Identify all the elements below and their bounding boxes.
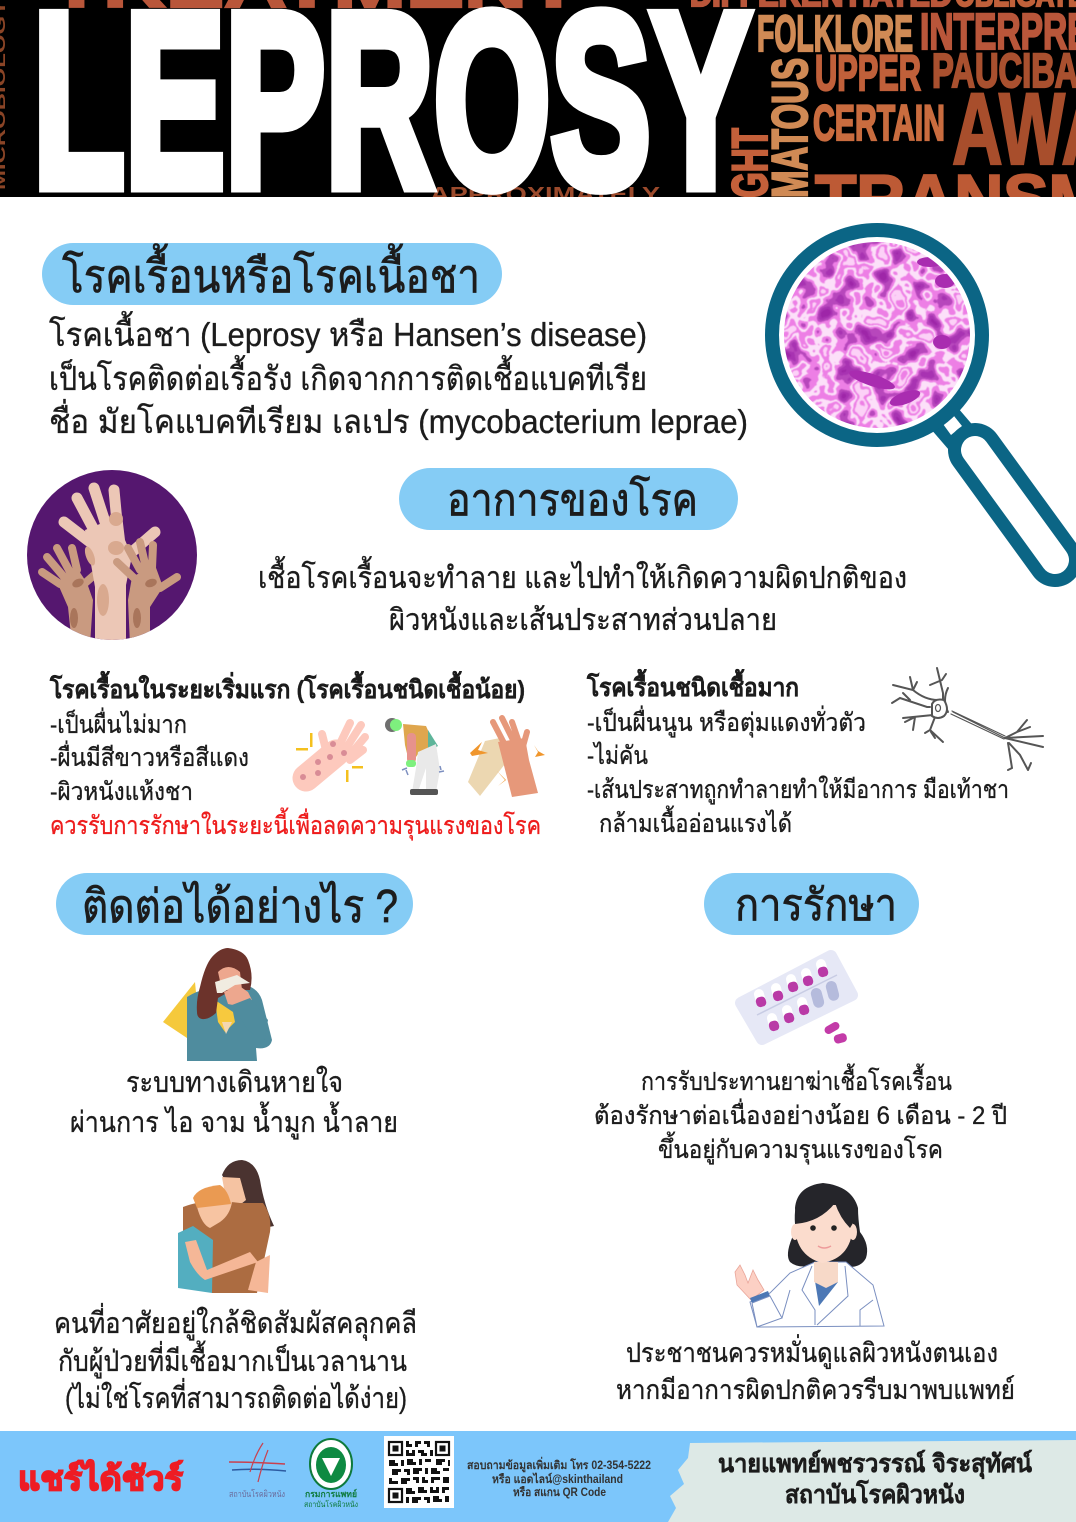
header banner: word cloud with LEPROSY title: UPPER [815, 45, 921, 101]
caption: close contact transmission: กับผู้ป่วยที่มีเชื้อมากเป็นเวลานาน [58, 1340, 407, 1379]
contact text: หรือ สแกน QR Code [513, 1486, 606, 1499]
logo: institute of dermatology [229, 1443, 286, 1499]
QR code [384, 1436, 454, 1508]
panel: early stage leprosy: -เป็นผื่นไม่มาก [50, 707, 187, 739]
heading pill: symptoms [399, 468, 738, 530]
panel: multibacillary leprosy: โรคเรื้อนชนิดเชื้อมาก [586, 668, 799, 702]
footer band [0, 1431, 1076, 1522]
logo: department of medical services [304, 1439, 358, 1509]
panel: multibacillary leprosy: -เส้นประสาทถูกทำลายทำให้มีอาการ มือเท้าชา [587, 775, 1009, 805]
caption: drug treatment [594, 1063, 1007, 1165]
symptoms intro text: เชื้อโรคเรื้อนจะทำลาย และไปทำให้เกิดความผิดปกติของ [258, 556, 907, 595]
heading pill: what is leprosy: โรคเรื้อนหรือโรคเนื้อชา [62, 243, 480, 302]
panel: early stage leprosy: -ผิวหนังแห้งชา [50, 778, 193, 806]
brand tagline: แชร์ได้ชัวร์ [18, 1459, 183, 1497]
definition text: เป็นโรคติดต่อเรื้อรัง เกิดจากการติดเชื้อแบคทีเรีย [49, 355, 647, 397]
caption: public advice [616, 1334, 1015, 1405]
caption: drug treatment: ขึ้นอยู่กับความรุนแรงของโรค [658, 1131, 943, 1165]
caption: close contact transmission: คนที่อาศัยอยู่ใกล้ชิดสัมผัสคลุกคลี [54, 1303, 417, 1341]
caption: public advice: ประชาชนควรหมั่นดูแลผิวหนังตนเอง [626, 1334, 998, 1369]
panel: early stage leprosy: ควรรับการรักษาในระยะนี้เพื่อลดความรุนแรงของโรค [50, 807, 541, 841]
icon: person bent over in pain [385, 718, 444, 795]
heading pill: symptoms: อาการของโรค [447, 475, 698, 525]
contact text: สอบถามข้อมูลเพิ่มเติม โทร 02-354-5222 [467, 1456, 651, 1473]
header banner: word cloud with LEPROSY title: CERTAIN [813, 95, 945, 151]
caption: public advice: หากมีอาการผิดปกติควรรีบมาพบแพทย์ [616, 1374, 1015, 1405]
caption: drug treatment: การรับประทานยาฆ่าเชื้อโรคเรื้อน [641, 1063, 952, 1096]
header banner: word cloud with LEPROSY title: APPROXIMATELY [430, 184, 661, 206]
illustration: blister pack of capsules [741, 956, 852, 1044]
panel: early stage leprosy: -ผื่นมีสีขาวหรือสีแดง [50, 740, 249, 772]
icon: raised hands with skin patches [27, 470, 197, 645]
symptoms intro text: ผิวหนังและเส้นประสาทส่วนปลาย [389, 604, 777, 637]
icon: neuron [892, 668, 1043, 770]
header banner: word cloud with LEPROSY title: FOLKLORE [757, 5, 913, 62]
header banner: word cloud with LEPROSY title: GHT [722, 128, 778, 198]
logo: department of medical services: กรมการแพทย์ [305, 1488, 357, 1499]
caption: close contact transmission: (ไม่ใช่โรคที่สามารถติดต่อได้ง่าย) [65, 1378, 407, 1415]
panel: early stage leprosy [49, 670, 541, 841]
caption: drug treatment: ต้องรักษาต่อเนื่องอย่างน้อย 6 เดือน - 2 ปี [594, 1098, 1007, 1130]
header banner: word cloud with LEPROSY title [0, 0, 1076, 197]
logo: department of medical services: สถาบันโรคผิวหนัง [304, 1499, 358, 1509]
author panel [668, 1440, 1076, 1522]
icon: hands with numbness [468, 718, 545, 797]
illustration: woman sneezing [163, 948, 272, 1061]
contact text: หรือ แอดไลน์@skinthailand [492, 1472, 623, 1486]
panel: multibacillary leprosy: กล้ามเนื้ออ่อนแรงได้ [599, 805, 792, 838]
heading pill: treatment [704, 873, 919, 935]
contact text [467, 1456, 651, 1499]
illustration: female doctor [735, 1183, 884, 1327]
caption: airborne transmission: ผ่านการ ไอ จาม น้ำมูก น้ำลาย [70, 1101, 398, 1140]
definition text: โรคเนื้อชา (Leprosy หรือ Hansen’s disease) [49, 311, 647, 353]
panel: multibacillary leprosy: -ไม่คัน [587, 741, 648, 770]
caption: close contact transmission [54, 1303, 417, 1415]
author panel: สถาบันโรคผิวหนัง [785, 1479, 965, 1509]
symptoms intro text [258, 556, 907, 637]
author panel: นายแพทย์พชรวรรณ์ จิระสุทัศน์ [718, 1449, 1032, 1480]
panel: early stage leprosy: โรคเรื้อนในระยะเริ่มแรก (โรคเรื้อนชนิดเชื้อน้อย) [49, 670, 525, 704]
illustration: people hugging [178, 1160, 274, 1293]
heading pill: treatment: การรักษา [735, 881, 897, 930]
panel: multibacillary leprosy [586, 668, 1009, 838]
caption: airborne transmission: ระบบทางเดินหายใจ [126, 1065, 343, 1099]
heading pill: transmission: ติดต่อได้อย่างไร ? [82, 880, 398, 932]
icon: arm with rash [296, 723, 365, 782]
magnifying glass with tissue micrograph [772, 230, 1055, 560]
panel: multibacillary leprosy: -เป็นผื่นนูน หรือตุ่มแดงทั่วตัว [587, 705, 866, 738]
caption: airborne transmission [70, 1065, 398, 1140]
logo: institute of dermatology: สถาบันโรคผิวหนัง [229, 1489, 285, 1499]
definition text [49, 311, 748, 440]
definition text: ชื่อ มัยโคแบคทีเรียม เลเปร (mycobacterium leprae) [49, 399, 748, 440]
